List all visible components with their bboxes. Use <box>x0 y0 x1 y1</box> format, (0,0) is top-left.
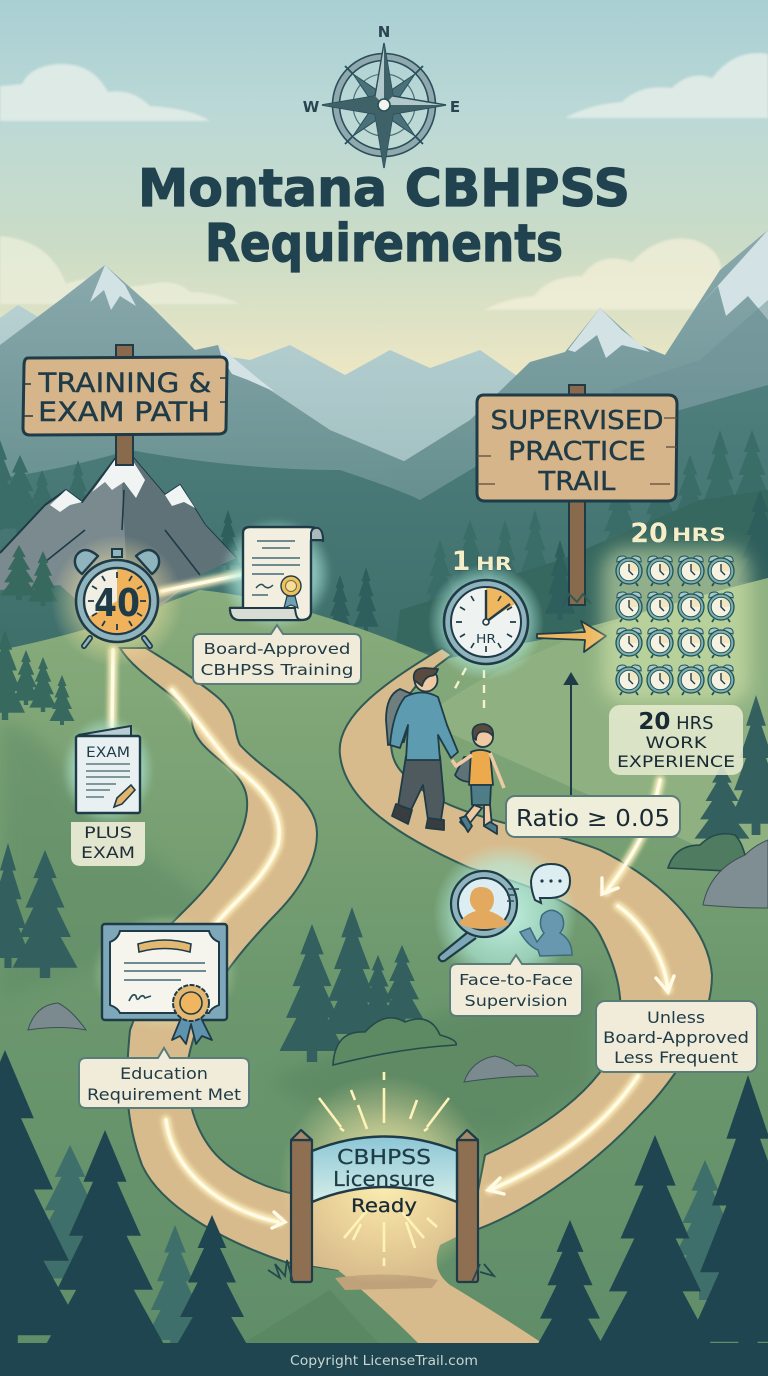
right trail <box>340 648 712 1232</box>
compass rose <box>303 23 460 168</box>
licensure gate: Ready <box>351 1195 417 1217</box>
label: education requirement met: Education <box>120 1064 208 1083</box>
meadow hills <box>0 578 768 1376</box>
right sign: supervised practice trail <box>477 385 677 606</box>
icon: exam paper: EXAM <box>86 745 130 761</box>
icon: face-to-face supervision <box>433 843 577 987</box>
mid forest hills <box>0 385 768 720</box>
title: Montana CBHPSS <box>138 159 630 219</box>
footer bar <box>0 1343 768 1376</box>
text: 1 hr: HR <box>476 553 512 575</box>
label: face-to-face supervision <box>450 955 582 1016</box>
label: board-approved training <box>193 625 361 684</box>
label: 20 hrs work experience: 20 HRS <box>638 709 714 735</box>
left mountain range <box>0 265 425 560</box>
sky background <box>0 0 768 400</box>
footer bar: Copyright LicenseTrail.com <box>290 1354 478 1369</box>
licensure gate: Licensure <box>333 1167 435 1191</box>
label: unless board-approved less frequent: Unless <box>647 1008 705 1027</box>
left sign: training and exam path: EXAM PATH <box>38 397 210 428</box>
dashes from clock to hikers <box>452 668 484 712</box>
glow routes <box>112 574 674 1228</box>
label: plus exam: PLUS <box>84 823 132 842</box>
label: 20 hrs work experience: WORK <box>646 733 707 752</box>
text: 20 hrs <box>630 518 726 549</box>
label: unless board-approved less frequent: Less Frequent <box>614 1048 738 1067</box>
center and side trees <box>0 695 768 1062</box>
left hill trees <box>0 545 74 725</box>
compass rose: N <box>378 23 390 41</box>
right sign: supervised practice trail: SUPERVISED <box>490 406 664 436</box>
icon: education certificate <box>92 914 238 1044</box>
label: face-to-face supervision: Supervision <box>464 992 568 1010</box>
compass rose: W <box>303 98 320 116</box>
label: ratio <box>506 796 680 837</box>
icon: exam paper <box>62 716 154 824</box>
label: education requirement met: Requirement Met <box>87 1085 241 1104</box>
label: board-approved training: Board-Approved <box>204 640 350 658</box>
rocks <box>28 840 768 1082</box>
text: 1 hr <box>452 546 512 577</box>
trail to the gate <box>290 1150 545 1345</box>
icon grid: twenty work hour clocks <box>602 548 750 704</box>
text: 1 hr: 1 <box>452 546 470 577</box>
arrow: one hour to twenty hours <box>537 621 606 652</box>
title: Requirements <box>205 214 563 274</box>
label: education requirement met <box>79 1048 249 1108</box>
icon: one hour clock <box>428 564 544 680</box>
label: 20 hrs work experience <box>609 705 743 775</box>
foreground dark trees <box>0 1050 768 1365</box>
label: board-approved training: CBHPSS Training <box>200 661 354 679</box>
licensure gate <box>268 1072 494 1285</box>
clouds <box>0 53 768 310</box>
text: 20 hrs: 20 <box>630 518 668 549</box>
left trail <box>120 648 340 1270</box>
licensure gate: CBHPSS <box>337 1145 431 1169</box>
left sign: training and exam path: TRAINING & <box>37 368 212 399</box>
label: unless board-approved less frequent <box>596 1001 757 1072</box>
arrow: ratio up to work hours <box>565 674 577 796</box>
right sign: supervised practice trail: TRAIL <box>537 467 616 497</box>
icon: one hour clock: HR <box>476 631 496 646</box>
title <box>138 159 630 274</box>
icon: 40 hour alarm clock: 40 <box>94 581 140 625</box>
left sign: training and exam path <box>23 345 227 465</box>
label: 20 hrs work experience: EXPERIENCE <box>617 752 735 771</box>
label: plus exam <box>71 822 145 866</box>
label: plus exam: EXAM <box>81 843 135 862</box>
small mountain peak <box>0 447 236 640</box>
label: ratio: Ratio ≥ 0.05 <box>516 806 670 832</box>
right sign: supervised practice trail: PRACTICE <box>508 437 646 467</box>
right mountain range <box>390 230 768 560</box>
icon: parent and child hikers <box>386 668 504 834</box>
far mountains <box>0 305 768 520</box>
label: face-to-face supervision: Face-to-Face <box>459 971 573 989</box>
icon: training scroll <box>220 518 332 630</box>
icon: 40 hour alarm clock <box>51 535 183 667</box>
bushes <box>333 834 748 1065</box>
compass rose: E <box>450 98 460 116</box>
label: unless board-approved less frequent: Board-Approved <box>603 1028 749 1047</box>
text: 20 hrs: HRS <box>672 524 726 546</box>
